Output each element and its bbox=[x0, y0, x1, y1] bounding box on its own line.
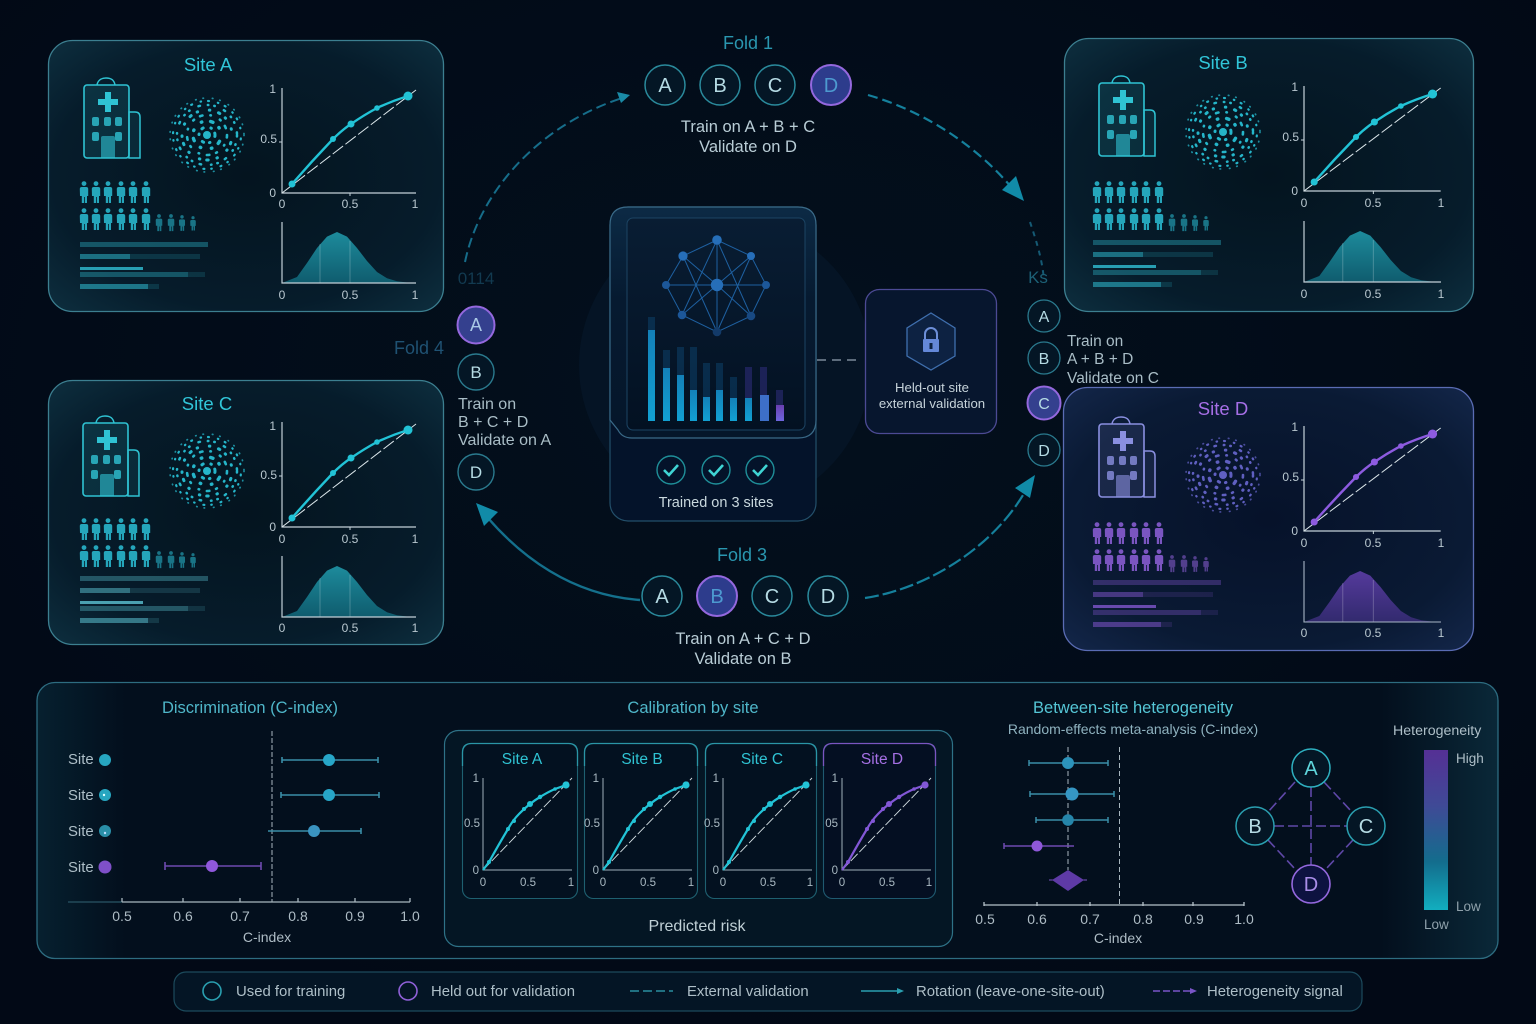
caption: trained on 3 sites: Trained on 3 sites bbox=[659, 495, 773, 511]
axis bbox=[975, 902, 1254, 946]
calibration chart B: 1 bbox=[1291, 80, 1298, 94]
fold 2 bbox=[1028, 268, 1159, 466]
mini chart: site D: 1 bbox=[832, 773, 838, 785]
icon: patient cohort B bbox=[1093, 181, 1209, 231]
calibration chart B: 0.5 bbox=[1282, 130, 1299, 144]
icon: training checks bbox=[657, 456, 774, 484]
caption: A + B + D bbox=[1067, 351, 1133, 368]
site circles: B bbox=[1039, 351, 1049, 368]
mini chart: site A: 1 bbox=[473, 773, 479, 785]
panel: bottom metrics bbox=[37, 682, 1498, 958]
site circles: B bbox=[713, 75, 727, 97]
heterogeneity network bbox=[1236, 749, 1385, 903]
mini chart: site C bbox=[704, 744, 816, 898]
pooled estimate diamond bbox=[1049, 870, 1087, 891]
axis: 0.6 bbox=[1027, 911, 1047, 927]
site circles bbox=[1028, 300, 1060, 466]
calibration chart A: 1 bbox=[269, 82, 276, 96]
mini chart: site C: 0.5 bbox=[704, 818, 720, 830]
axis: 0.7 bbox=[1080, 911, 1100, 927]
axis: 0.9 bbox=[345, 908, 365, 924]
site circles: B bbox=[470, 363, 482, 382]
arrow: fold 4 to fold 1 bbox=[465, 92, 630, 262]
calibration chart A: 1 bbox=[412, 197, 419, 211]
mini chart: site D: 0 bbox=[839, 877, 845, 889]
axis: 0.8 bbox=[288, 908, 308, 924]
heading: site D: Site D bbox=[1198, 398, 1248, 419]
mini chart: site D: 05 bbox=[825, 818, 838, 830]
mini chart: site D bbox=[824, 744, 936, 898]
calibration chart D bbox=[1282, 420, 1445, 550]
connector: model to held-out site bbox=[817, 359, 860, 361]
caption: held-out site: external validation bbox=[879, 396, 985, 411]
caption: Train on A + B + C bbox=[681, 118, 815, 136]
calibration chart B: 0 bbox=[1301, 196, 1308, 210]
axis: C-index bbox=[1094, 930, 1142, 946]
mini chart: site C: 0 bbox=[720, 877, 726, 889]
heterogeneity scale: Low bbox=[1456, 899, 1481, 914]
heading: calibration: Calibration by site bbox=[627, 699, 759, 717]
legend: used for training: Used for training bbox=[236, 984, 345, 1000]
data bars B bbox=[1093, 240, 1221, 287]
panel: site A bbox=[48, 40, 444, 312]
forest plot points bbox=[165, 754, 379, 872]
calibration chart C: 0.5 bbox=[260, 468, 277, 482]
axis label: predicted risk: Predicted risk bbox=[649, 918, 746, 935]
site labels: Site bbox=[68, 824, 94, 840]
calibration chart C: 0.5 bbox=[342, 532, 359, 546]
heading: fold 3: Fold 3 bbox=[717, 545, 767, 565]
risk distribution A bbox=[279, 222, 419, 302]
axis: 0.8 bbox=[1133, 911, 1153, 927]
heading: fold 4: Fold 4 bbox=[394, 338, 444, 358]
mini chart: site A: 0 bbox=[473, 865, 479, 877]
calibration chart B bbox=[1282, 80, 1445, 210]
risk distribution A: 1 bbox=[412, 288, 419, 302]
icon: neural network bbox=[662, 235, 770, 336]
panel: site D bbox=[1064, 388, 1474, 650]
heterogeneity network: B bbox=[1248, 816, 1262, 838]
calibration chart D: 1 bbox=[1291, 420, 1298, 434]
mini chart: site B: 0 bbox=[600, 877, 606, 889]
calibration chart B: 0 bbox=[1291, 184, 1298, 198]
site circles: C bbox=[768, 75, 782, 97]
risk distribution C bbox=[279, 556, 419, 635]
caption: Validate on A bbox=[458, 432, 551, 449]
icon: patient cohort D bbox=[1093, 522, 1209, 572]
caption: Validate on B bbox=[695, 650, 791, 668]
calibration chart B: 1 bbox=[1438, 196, 1445, 210]
mini chart: site C: Site C bbox=[741, 751, 783, 768]
site circles: D bbox=[470, 463, 482, 482]
heterogeneity scale: Low bbox=[1424, 917, 1449, 932]
icon: lock bbox=[907, 313, 955, 370]
axis: 1.0 bbox=[1234, 911, 1254, 927]
fold 4 bbox=[394, 269, 551, 490]
axis: 0.5 bbox=[112, 908, 132, 924]
fold 3 bbox=[642, 545, 848, 668]
site circles bbox=[458, 306, 494, 490]
risk distribution B: 0.5 bbox=[1365, 287, 1382, 301]
heading: fold 1: Fold 1 bbox=[723, 33, 773, 53]
caption: Train on bbox=[1067, 333, 1123, 350]
calibration chart A: 0 bbox=[269, 186, 276, 200]
subheading: Random-effects meta-analysis (C-index) bbox=[1008, 721, 1258, 737]
site circles: D bbox=[824, 75, 838, 97]
calibration chart B: 0.5 bbox=[1365, 196, 1382, 210]
heterogeneity forest plot bbox=[975, 699, 1258, 946]
risk distribution C: 0 bbox=[279, 621, 286, 635]
risk distribution B bbox=[1301, 221, 1445, 301]
calibration chart A: 0.5 bbox=[342, 197, 359, 211]
mini chart: site C: 0 bbox=[713, 865, 719, 877]
heading: site B: Site B bbox=[1198, 52, 1248, 73]
panel: central model bbox=[610, 207, 816, 521]
risk distribution B: 1 bbox=[1438, 287, 1445, 301]
panel: calibration by site bbox=[444, 699, 952, 946]
risk distribution D: 0.5 bbox=[1365, 626, 1382, 640]
fold 1 bbox=[645, 33, 851, 156]
calibration chart D: 0 bbox=[1291, 524, 1298, 538]
site circles: D bbox=[1038, 443, 1050, 460]
legend: used for training bbox=[203, 982, 345, 1000]
heading: discrimination: Discrimination (C-index) bbox=[162, 699, 338, 717]
axis: 0.5 bbox=[975, 911, 995, 927]
calibration chart C bbox=[260, 419, 419, 546]
legend: external validation: External validation bbox=[687, 984, 809, 1000]
risk distribution A: 0.5 bbox=[342, 288, 359, 302]
risk distribution D bbox=[1301, 561, 1445, 640]
mini chart: site C: 1 bbox=[807, 877, 813, 889]
axis: 0.7 bbox=[230, 908, 250, 924]
site circles: D bbox=[821, 586, 835, 608]
mini chart: site D: 0 bbox=[832, 865, 838, 877]
risk distribution D: 0 bbox=[1301, 626, 1308, 640]
heading: site A: Site A bbox=[184, 54, 233, 75]
data bars A bbox=[80, 242, 208, 289]
mini chart: site A: 0.5 bbox=[464, 818, 480, 830]
bar chart: model output bbox=[648, 317, 784, 421]
heterogeneity network: D bbox=[1304, 874, 1318, 896]
calibration chart D: 0.5 bbox=[1365, 536, 1382, 550]
mini chart: site D: 0.5 bbox=[879, 877, 895, 889]
site circles bbox=[642, 576, 848, 616]
calibration chart A bbox=[260, 82, 419, 211]
calibration chart C: 0 bbox=[269, 520, 276, 534]
risk distribution A: 0 bbox=[279, 288, 286, 302]
icon: hospital C bbox=[83, 416, 139, 496]
site circles: B bbox=[710, 586, 724, 608]
mini chart: site B: 0.5 bbox=[584, 818, 600, 830]
mini chart: site B bbox=[584, 744, 698, 898]
icon: hospital B bbox=[1099, 76, 1155, 156]
icon: patient data cloud C bbox=[170, 434, 244, 508]
site circles: A bbox=[1039, 309, 1050, 326]
site labels: Site bbox=[68, 860, 94, 876]
forest points bbox=[1004, 757, 1114, 852]
glow disc behind model bbox=[579, 219, 871, 511]
calibration chart D: 1 bbox=[1438, 536, 1445, 550]
data bars C bbox=[80, 576, 208, 623]
mini chart: site D: Site D bbox=[861, 751, 903, 768]
risk distribution C: 1 bbox=[412, 621, 419, 635]
axis bbox=[68, 898, 420, 945]
arrow: fold 1 to fold 2 bbox=[868, 95, 1044, 280]
heterogeneity scale: Heterogeneity bbox=[1393, 723, 1482, 739]
axis: C-index bbox=[243, 929, 291, 945]
site labels: Site bbox=[68, 752, 94, 768]
mini chart: site A: Site A bbox=[502, 751, 543, 768]
mini chart: site B: 1 bbox=[593, 773, 599, 785]
site circles: A bbox=[658, 75, 672, 97]
calibration chart D: 0.5 bbox=[1282, 470, 1299, 484]
mini chart: site A: 1 bbox=[568, 877, 574, 889]
legend bbox=[174, 972, 1362, 1011]
axis: 0.6 bbox=[173, 908, 193, 924]
mini chart: site B: 1 bbox=[688, 877, 694, 889]
risk distribution D: 1 bbox=[1438, 626, 1445, 640]
heading: site C: Site C bbox=[182, 393, 232, 414]
legend: rotation: Rotation (leave-one-site-out) bbox=[916, 984, 1105, 1000]
mini chart: site B: 0.5 bbox=[640, 877, 656, 889]
icon: patient data cloud D bbox=[1186, 438, 1260, 512]
discrimination chart bbox=[68, 699, 420, 945]
mini chart: site B: 0 bbox=[593, 865, 599, 877]
panel: site C bbox=[48, 380, 444, 644]
arrow: fold 3 to fold 4 bbox=[476, 503, 640, 600]
mini chart: site B: Site B bbox=[621, 751, 663, 768]
caption: Validate on D bbox=[699, 138, 797, 156]
mini chart: site D: 1 bbox=[926, 877, 932, 889]
icon: patient cohort A bbox=[80, 181, 196, 231]
data bars D bbox=[1093, 580, 1221, 627]
site circles: C bbox=[765, 586, 779, 608]
icon: patient data cloud A bbox=[170, 98, 244, 172]
icon: hospital A bbox=[84, 78, 140, 158]
site circles bbox=[645, 65, 851, 105]
heterogeneity network: C bbox=[1359, 816, 1373, 838]
legend: heterogeneity signal: Heterogeneity signal bbox=[1207, 984, 1343, 1000]
site circles: C bbox=[1038, 396, 1050, 413]
mini chart: site A: 0.5 bbox=[520, 877, 536, 889]
caption: Train on A + C + D bbox=[675, 630, 811, 648]
heterogeneity scale: High bbox=[1456, 751, 1484, 766]
heading: heterogeneity: Between-site heterogeneity bbox=[1033, 699, 1234, 717]
arrow: fold 2 to fold 3 bbox=[865, 475, 1035, 598]
faded label: Ks bbox=[1028, 268, 1048, 287]
heterogeneity network: A bbox=[1304, 758, 1318, 780]
mini chart: site A bbox=[462, 744, 578, 898]
icon: patient data cloud B bbox=[1186, 95, 1260, 169]
panel: site B bbox=[1064, 38, 1474, 312]
mini chart: site C: 1 bbox=[713, 773, 719, 785]
mini chart: site A: 0 bbox=[480, 877, 486, 889]
icon: hospital D bbox=[1099, 417, 1155, 497]
axis: 1.0 bbox=[400, 908, 420, 924]
caption: Train on bbox=[458, 396, 516, 413]
legend: held out for validation: Held out for validation bbox=[431, 984, 575, 1000]
panel: held-out site bbox=[866, 290, 996, 434]
calibration chart C: 0 bbox=[279, 532, 286, 546]
heterogeneity scale bbox=[1393, 723, 1484, 932]
risk distribution C: 0.5 bbox=[342, 621, 359, 635]
axis: 0.9 bbox=[1184, 911, 1204, 927]
site labels bbox=[68, 752, 112, 876]
faded label: 0114 bbox=[458, 269, 494, 288]
icon: patient cohort C bbox=[80, 518, 196, 568]
mini chart: site C: 0.5 bbox=[760, 877, 776, 889]
caption: Validate on C bbox=[1067, 370, 1159, 387]
site labels: Site bbox=[68, 788, 94, 804]
calibration chart C: 1 bbox=[269, 419, 276, 433]
site circles: A bbox=[655, 586, 669, 608]
site circles: A bbox=[470, 315, 482, 335]
caption: B + C + D bbox=[458, 414, 528, 431]
calibration chart D: 0 bbox=[1301, 536, 1308, 550]
calibration chart A: 0 bbox=[279, 197, 286, 211]
caption: held-out site: Held-out site bbox=[895, 380, 969, 395]
risk distribution B: 0 bbox=[1301, 287, 1308, 301]
calibration chart A: 0.5 bbox=[260, 132, 277, 146]
calibration chart C: 1 bbox=[412, 532, 419, 546]
